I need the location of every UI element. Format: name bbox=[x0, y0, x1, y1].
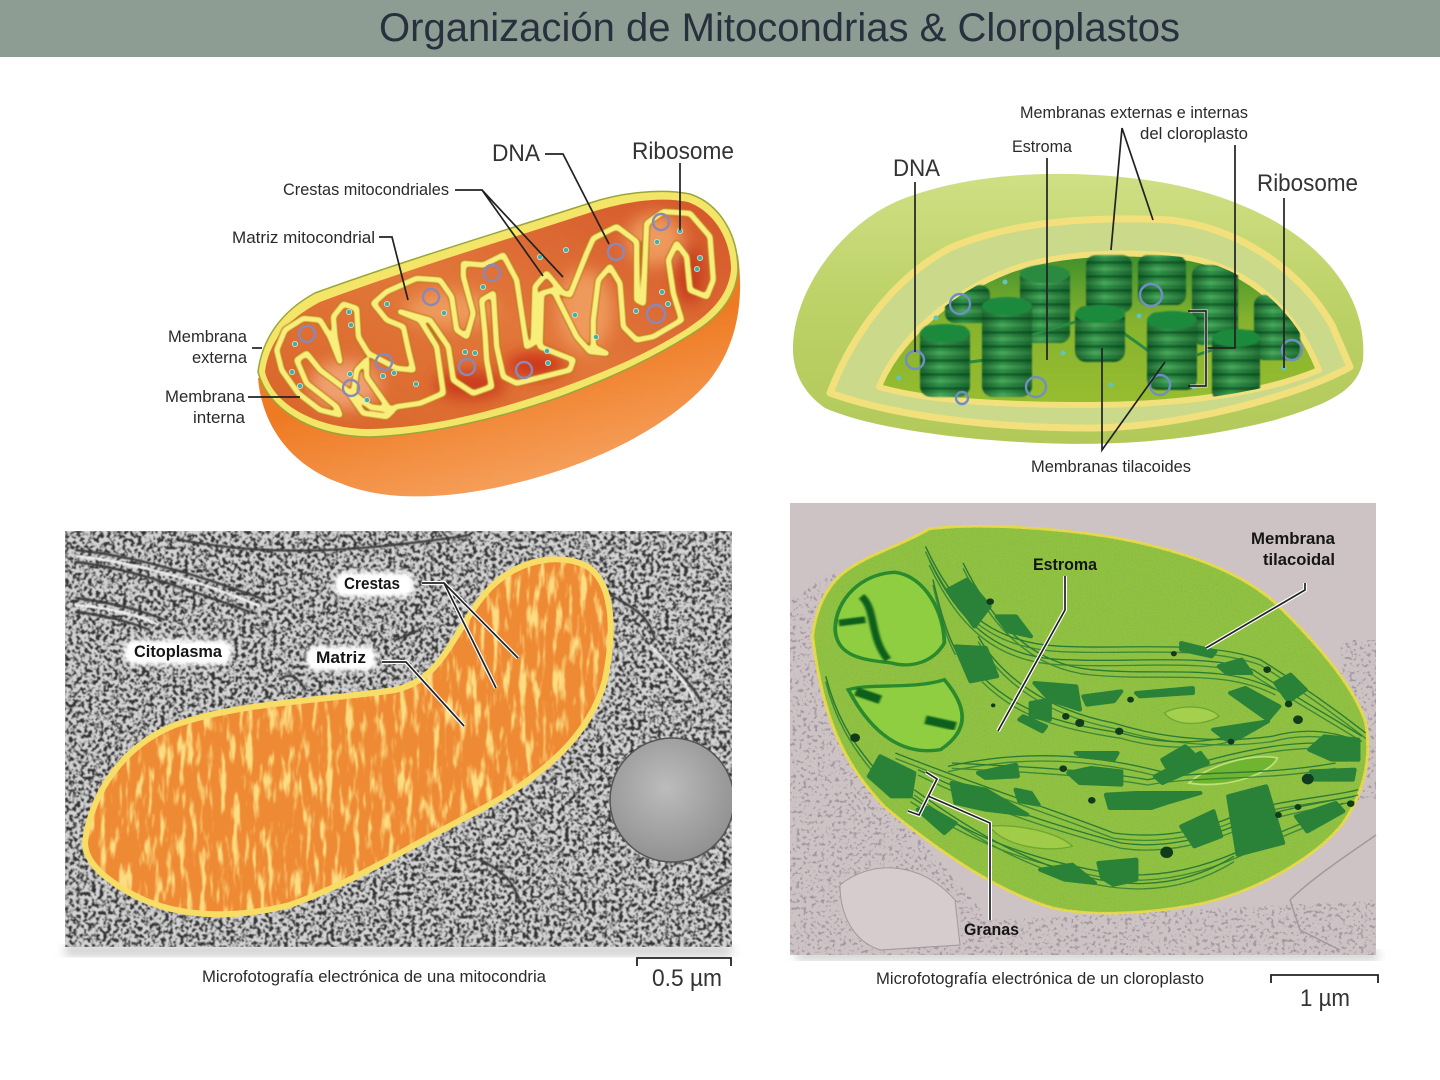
labels: mitochondrion diagram: interna bbox=[193, 408, 246, 427]
leader lines: mitochondrion diagram bbox=[248, 154, 680, 397]
grana bbox=[869, 580, 1358, 885]
dark plastoglobuli bbox=[850, 598, 1354, 858]
labels: mitochondrion diagram bbox=[165, 138, 734, 427]
panel: chloroplast diagram bbox=[793, 103, 1363, 476]
micrograph background bbox=[65, 531, 734, 947]
labels: mitochondrion diagram: Membrana bbox=[165, 387, 246, 406]
labels: mitochondrion micrograph bbox=[134, 575, 400, 667]
title banner bbox=[0, 0, 1440, 57]
labels: chloroplast diagram: Membranas externas e internas bbox=[1020, 103, 1248, 122]
labels: mitochondrion diagram: externa bbox=[192, 348, 248, 367]
panel: mitochondrion diagram bbox=[165, 138, 740, 496]
mitochondrion micrograph body bbox=[82, 556, 614, 918]
labels: chloroplast diagram: DNA bbox=[893, 155, 940, 182]
starch granules bbox=[835, 572, 1277, 849]
labels: mitochondrion micrograph: Crestas bbox=[344, 575, 400, 593]
labels: mitochondrion diagram: DNA bbox=[492, 140, 540, 167]
extra lamellae bbox=[826, 552, 1366, 889]
micrograph white label backgrounds bbox=[124, 572, 414, 671]
scale bar 0.5 µm bbox=[637, 958, 731, 992]
chloroplast micrograph body bbox=[811, 525, 1370, 914]
chloroplast outer envelope bbox=[793, 174, 1363, 444]
leader lines: mitochondrion micrograph bbox=[382, 583, 518, 726]
labels: mitochondrion diagram: Crestas mitocondriales bbox=[283, 180, 449, 199]
labels: chloroplast micrograph: Estroma bbox=[1033, 556, 1098, 574]
green stipple bbox=[813, 526, 1368, 913]
labels: chloroplast diagram: Estroma bbox=[1012, 137, 1073, 156]
labels: chloroplast micrograph: Granas bbox=[964, 921, 1019, 939]
stroma lamellae bbox=[970, 322, 1212, 362]
mitochondrion body bbox=[258, 255, 740, 496]
labels: mitochondrion diagram: Ribosome bbox=[632, 138, 734, 165]
labels: mitochondrion micrograph: Citoplasma bbox=[134, 643, 223, 661]
ribosomes bbox=[289, 228, 703, 403]
labels: chloroplast micrograph: tilacoidal bbox=[1263, 551, 1335, 569]
labels: chloroplast micrograph: Membrana bbox=[1251, 530, 1336, 548]
leader lines: chloroplast micrograph bbox=[908, 576, 1305, 920]
title: Organización de Mitocondrias & Cloroplastos bbox=[379, 6, 1180, 50]
labels: chloroplast micrograph bbox=[964, 530, 1336, 939]
scale bar 1 µm bbox=[1271, 975, 1378, 1012]
leader lines: chloroplast diagram bbox=[915, 128, 1284, 450]
yellow outer membrane bbox=[830, 219, 1350, 428]
labels: chloroplast diagram: del cloroplasto bbox=[1140, 124, 1248, 143]
back grana bbox=[945, 255, 1300, 360]
chloroplast ribosomes bbox=[896, 280, 1286, 390]
labels: mitochondrion diagram: Membrana bbox=[168, 327, 248, 346]
labels: mitochondrion diagram: Matriz mitocondrial bbox=[232, 228, 375, 247]
labels: chloroplast diagram bbox=[893, 103, 1358, 476]
chloroplast DNA rings bbox=[906, 284, 1302, 404]
yellow inner membrane bbox=[879, 254, 1319, 405]
labels: chloroplast diagram: Membranas tilacoides bbox=[1031, 457, 1191, 476]
labels: mitochondrion micrograph: Matriz bbox=[316, 649, 366, 667]
micrograph shadow bbox=[796, 950, 1378, 960]
labels: chloroplast diagram: Ribosome bbox=[1257, 170, 1358, 197]
thylakoid lamellae bbox=[826, 546, 1366, 884]
scale bar 0.5 µm: 0.5 µm bbox=[652, 965, 722, 992]
caption: Microfotografía electrónica de un cloroplasto bbox=[876, 969, 1204, 988]
scale bar 1 µm: 1 µm bbox=[1300, 985, 1350, 1012]
panel: mitochondrion micrograph bbox=[65, 531, 734, 992]
caption: Microfotografía electrónica de una mitocondria bbox=[202, 967, 547, 986]
panel: chloroplast micrograph bbox=[790, 503, 1378, 1012]
front grana bbox=[920, 297, 1260, 402]
cristae folds bbox=[277, 212, 713, 417]
micrograph background bbox=[790, 503, 1376, 955]
micrograph shadow bbox=[65, 945, 732, 956]
mitochondrion cut face bbox=[258, 191, 738, 437]
vesicle bbox=[610, 738, 734, 862]
DNA rings bbox=[299, 214, 669, 396]
grana stacks bbox=[920, 255, 1300, 402]
